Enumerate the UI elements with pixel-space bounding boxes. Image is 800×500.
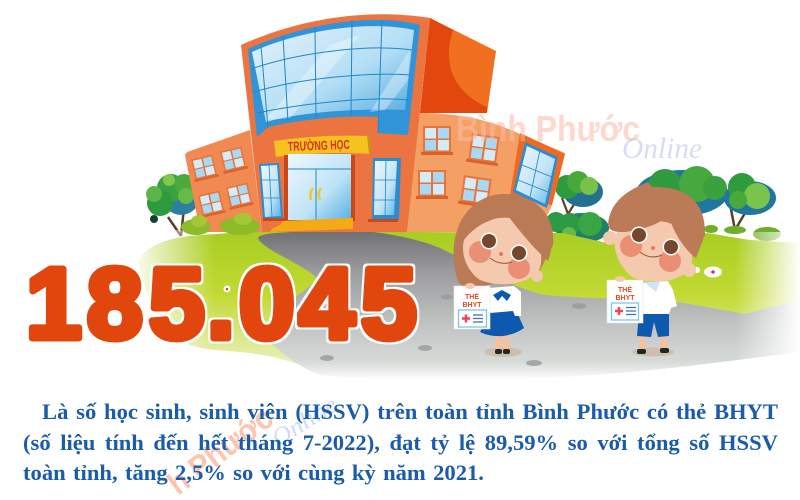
wing windows (190, 126, 502, 218)
far right bushes (704, 225, 781, 241)
right wing (407, 113, 565, 232)
sign (274, 136, 371, 157)
school building (185, 14, 565, 232)
girl student (454, 194, 553, 357)
bushes in front of the left wing (181, 213, 260, 235)
entrance door (284, 154, 355, 221)
description paragraph: (số liệu tính đến hết tháng 7-2022), đạt tỷ lệ 89,59% so với tổng số HSSV (23, 430, 778, 454)
face (463, 218, 541, 284)
trees and bushes behind the school (146, 166, 781, 243)
shirt (642, 281, 677, 314)
legs and shoes (637, 335, 669, 354)
tall window right (368, 158, 401, 222)
left tree (146, 174, 200, 236)
left wing (185, 130, 262, 232)
far right trees (636, 166, 776, 230)
health card: BHYT (615, 295, 635, 302)
ground fade to white at right (735, 232, 800, 367)
health card: THẺ (465, 292, 479, 301)
watermark: Bình Phước Online (bottom, diagonal, cropped by the frame in the reference) (161, 392, 343, 500)
shorts (637, 312, 669, 337)
eyes (480, 232, 528, 262)
mouth and nose (490, 252, 512, 263)
fringe (609, 190, 704, 258)
small flowers (224, 266, 722, 292)
watermark: Bình Phước Online (top) (456, 108, 702, 165)
watermark: Bình Phước Online (bottom, diagonal, cropped by the frame in the reference): h Phước (161, 399, 280, 500)
hair back (608, 182, 705, 258)
eyes (630, 226, 680, 256)
sign: TRƯỜNG HỌC (288, 137, 350, 154)
hair back (454, 194, 553, 290)
steps (270, 218, 353, 232)
big number 185.045: 185.045 (26, 248, 417, 360)
fringe (459, 201, 552, 261)
shadow (484, 347, 522, 357)
right side glass (513, 142, 558, 208)
mouth and nose (640, 246, 662, 257)
right-of-school bush (546, 212, 609, 243)
watermark: Bình Phước Online (top): Online (622, 132, 702, 165)
shadow (632, 348, 674, 356)
health card: THẺ (618, 285, 632, 294)
tall window left (259, 163, 284, 221)
shirt (488, 286, 521, 316)
ground: lawn (130, 230, 799, 373)
description paragraph: Là số học sinh, sinh viên (HSSV) trên toàn tỉnh Bình Phước có thẻ BHYT (42, 399, 778, 424)
health card: BHYT (462, 302, 482, 309)
side wall of tower (420, 18, 496, 113)
cheeks (469, 241, 530, 279)
right-of-school tree (555, 171, 603, 214)
health card (607, 276, 643, 323)
boy student (603, 182, 705, 356)
legs and shoes (495, 334, 510, 354)
watermark: Bình Phước Online (top): Bình Phước (456, 108, 640, 149)
face (614, 221, 692, 282)
tower glass (248, 20, 420, 137)
health card (454, 283, 490, 329)
description paragraph: toàn tỉnh, tăng 2,5% so với cùng kỳ năm 2021. (23, 460, 484, 485)
ground: road (258, 230, 800, 380)
cheeks (620, 235, 681, 272)
description paragraph (23, 399, 778, 485)
watermark: Bình Phước Online (bottom, diagonal, cropped by the frame in the reference): Online (267, 392, 343, 452)
tower front (241, 14, 430, 232)
skirt (480, 310, 524, 336)
